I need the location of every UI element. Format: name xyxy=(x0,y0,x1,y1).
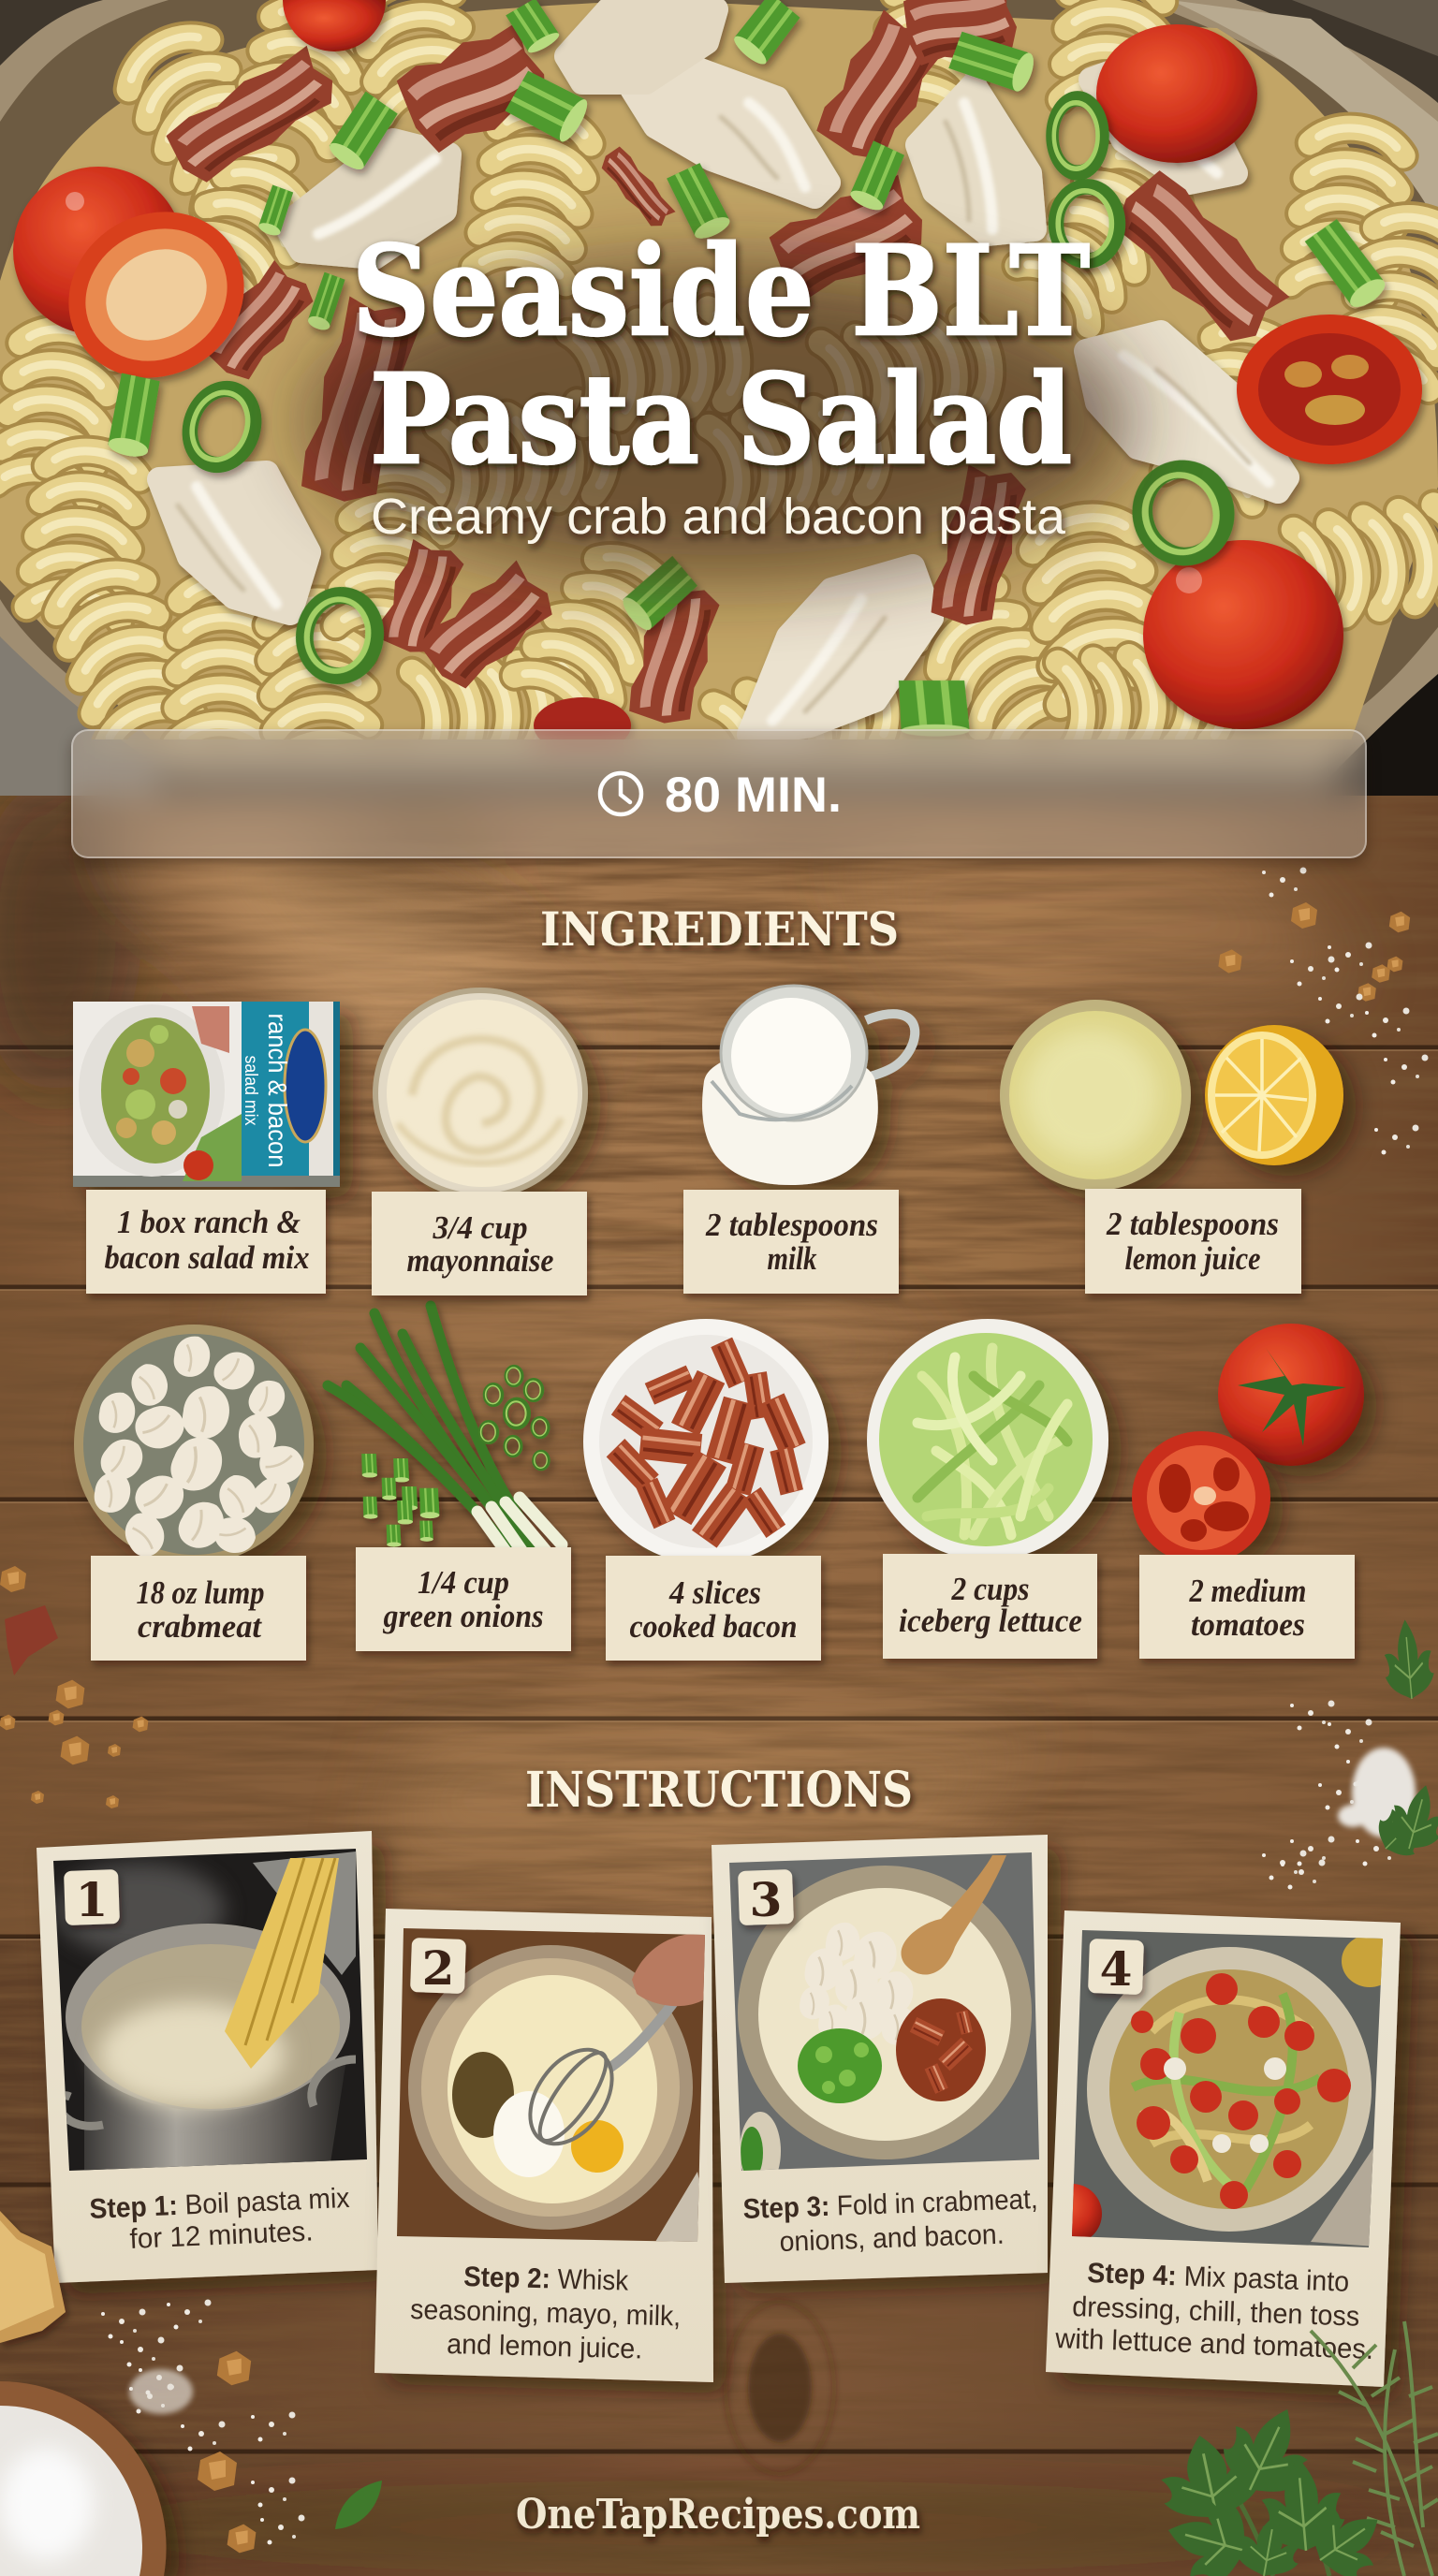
label: milk: 2 tablespoons xyxy=(705,1207,878,1243)
label: tomatoes: tomatoes xyxy=(1191,1606,1305,1643)
ingredient: crabmeat plate xyxy=(74,1325,314,1564)
ingredient: iceberg lettuce bowl xyxy=(867,1319,1108,1560)
dark shade behind title xyxy=(309,262,1133,580)
crab meat chunks xyxy=(159,9,1287,735)
label: salad mix: bacon salad mix xyxy=(105,1239,309,1276)
icon: clock xyxy=(600,773,641,814)
label: bacon: cooked bacon xyxy=(629,1608,798,1645)
label: green onions xyxy=(356,1547,571,1651)
step 4 text: Step 4: Mix pasta into xyxy=(1087,2258,1350,2298)
title xyxy=(352,219,1090,492)
tomatoes xyxy=(13,0,1422,754)
pasta spirals xyxy=(0,0,1438,792)
label: crabmeat: crabmeat xyxy=(138,1608,262,1645)
step card 4 xyxy=(1042,1910,1401,2387)
label: milk: milk xyxy=(768,1240,817,1277)
photo: folding in crab, onions, bacon xyxy=(721,1844,1049,2190)
ingredient: ranch and bacon salad mix box xyxy=(73,1002,340,1187)
label: salad mix: 1 box ranch & xyxy=(117,1204,301,1240)
leaves on right edge xyxy=(1369,1617,1438,1866)
step 3 text: Step 3: Fold in crabmeat, xyxy=(742,2184,1038,2225)
photo: whisking dressing xyxy=(393,1919,712,2247)
photo: finished pasta salad xyxy=(1042,1924,1398,2251)
panel: hero pasta salad photo xyxy=(0,0,1438,796)
cook time: 80 MIN. xyxy=(665,768,842,823)
label: lettuce: 2 cups xyxy=(951,1571,1030,1607)
number badge 3 xyxy=(738,1869,794,1927)
step 4 text: with lettuce and tomatoes. xyxy=(1054,2323,1374,2365)
ingredient: whole tomato xyxy=(1218,1324,1364,1466)
panel: instructions xyxy=(37,1831,1401,2387)
ingredient: lemon juice bowl xyxy=(1000,1000,1191,1191)
label: bacon: 4 slices xyxy=(668,1574,761,1611)
step 1 text: for 12 minutes. xyxy=(129,2216,314,2255)
label: milk xyxy=(683,1190,899,1294)
ingredient: ranch and bacon salad mix box: ranch & bacon xyxy=(263,1013,292,1168)
step 2 text xyxy=(410,2261,682,2364)
icon: bread piece xyxy=(0,2211,66,2343)
label: crabmeat: 18 oz lump xyxy=(137,1574,264,1611)
time bar xyxy=(71,729,1367,858)
label: tomatoes: 2 medium xyxy=(1189,1573,1307,1609)
ingredient: milk jug xyxy=(702,986,915,1185)
ingredient: cooked bacon plate xyxy=(583,1319,829,1564)
panel: ingredients xyxy=(73,986,1364,1661)
step card 3 xyxy=(712,1835,1049,2283)
step 1 text xyxy=(89,2183,350,2255)
ingredient: mayonnaise bowl xyxy=(373,988,588,1199)
label: lemon juice: 2 tablespoons xyxy=(1106,1206,1279,1242)
step 4 text: dressing, chill, then toss xyxy=(1072,2291,1360,2333)
step 2 text: and lemon juice. xyxy=(447,2329,643,2364)
ingredient: cut tomato xyxy=(1132,1431,1270,1564)
crumbs and salt scatter xyxy=(0,867,1429,1889)
number badge 4 xyxy=(1088,1939,1144,1997)
label: green onions: 1/4 cup xyxy=(418,1564,509,1601)
label: crabmeat xyxy=(91,1556,306,1661)
footer website: OneTapRecipes.com xyxy=(516,2491,920,2539)
step 2 text: seasoning, mayo, milk, xyxy=(410,2294,682,2333)
heading: instructions: INSTRUCTIONS xyxy=(525,1762,913,1819)
step 1 text: Step 1: Boil pasta mix xyxy=(89,2183,350,2225)
ingredient: lemon half xyxy=(1205,1025,1343,1165)
salt and crumbs near bowl xyxy=(101,2299,382,2553)
label: bacon xyxy=(606,1556,821,1661)
title: Seaside BLT xyxy=(352,219,1090,364)
label: mayonnaise: 3/4 cup xyxy=(433,1209,528,1246)
title: Pasta Salad xyxy=(370,347,1072,492)
wood table background xyxy=(0,777,1438,2576)
number badge 3: 3 xyxy=(750,1872,782,1927)
step card 1 xyxy=(37,1831,384,2283)
label: lettuce: iceberg lettuce xyxy=(899,1603,1082,1639)
number badge 2 xyxy=(410,1938,466,1996)
label: tomatoes xyxy=(1139,1555,1355,1659)
step 4 text xyxy=(1054,2258,1374,2365)
icon: salt bowl xyxy=(0,2381,167,2576)
step 3 text: onions, and bacon. xyxy=(779,2219,1005,2258)
ingredient: ranch and bacon salad mix box: salad mix xyxy=(241,1056,260,1126)
step 3 text xyxy=(742,2184,1038,2258)
photo: boiling pasta xyxy=(53,1849,367,2171)
label: lettuce xyxy=(883,1554,1097,1659)
label: lemon juice: lemon juice xyxy=(1125,1240,1260,1277)
green onion pieces xyxy=(105,0,1389,737)
number badge 2: 2 xyxy=(422,1940,454,1996)
herbs bottom right xyxy=(1152,2321,1438,2576)
subtitle: Creamy crab and bacon pasta xyxy=(371,489,1066,545)
number badge 1: 1 xyxy=(76,1872,108,1927)
bacon pieces xyxy=(161,0,1295,730)
heading: ingredients: INGREDIENTS xyxy=(540,901,899,957)
label: salad mix xyxy=(86,1190,326,1294)
label: mayonnaise: mayonnaise xyxy=(406,1242,554,1279)
label: lemon juice xyxy=(1085,1189,1301,1294)
label: mayonnaise xyxy=(372,1192,587,1295)
ingredient: green onions xyxy=(328,1306,562,1577)
number badge 4: 4 xyxy=(1100,1941,1132,1997)
number badge 1 xyxy=(64,1869,120,1927)
step 2 text: Step 2: Whisk xyxy=(463,2261,630,2297)
step card 2 xyxy=(374,1909,713,2382)
label: green onions: green onions xyxy=(383,1598,543,1634)
